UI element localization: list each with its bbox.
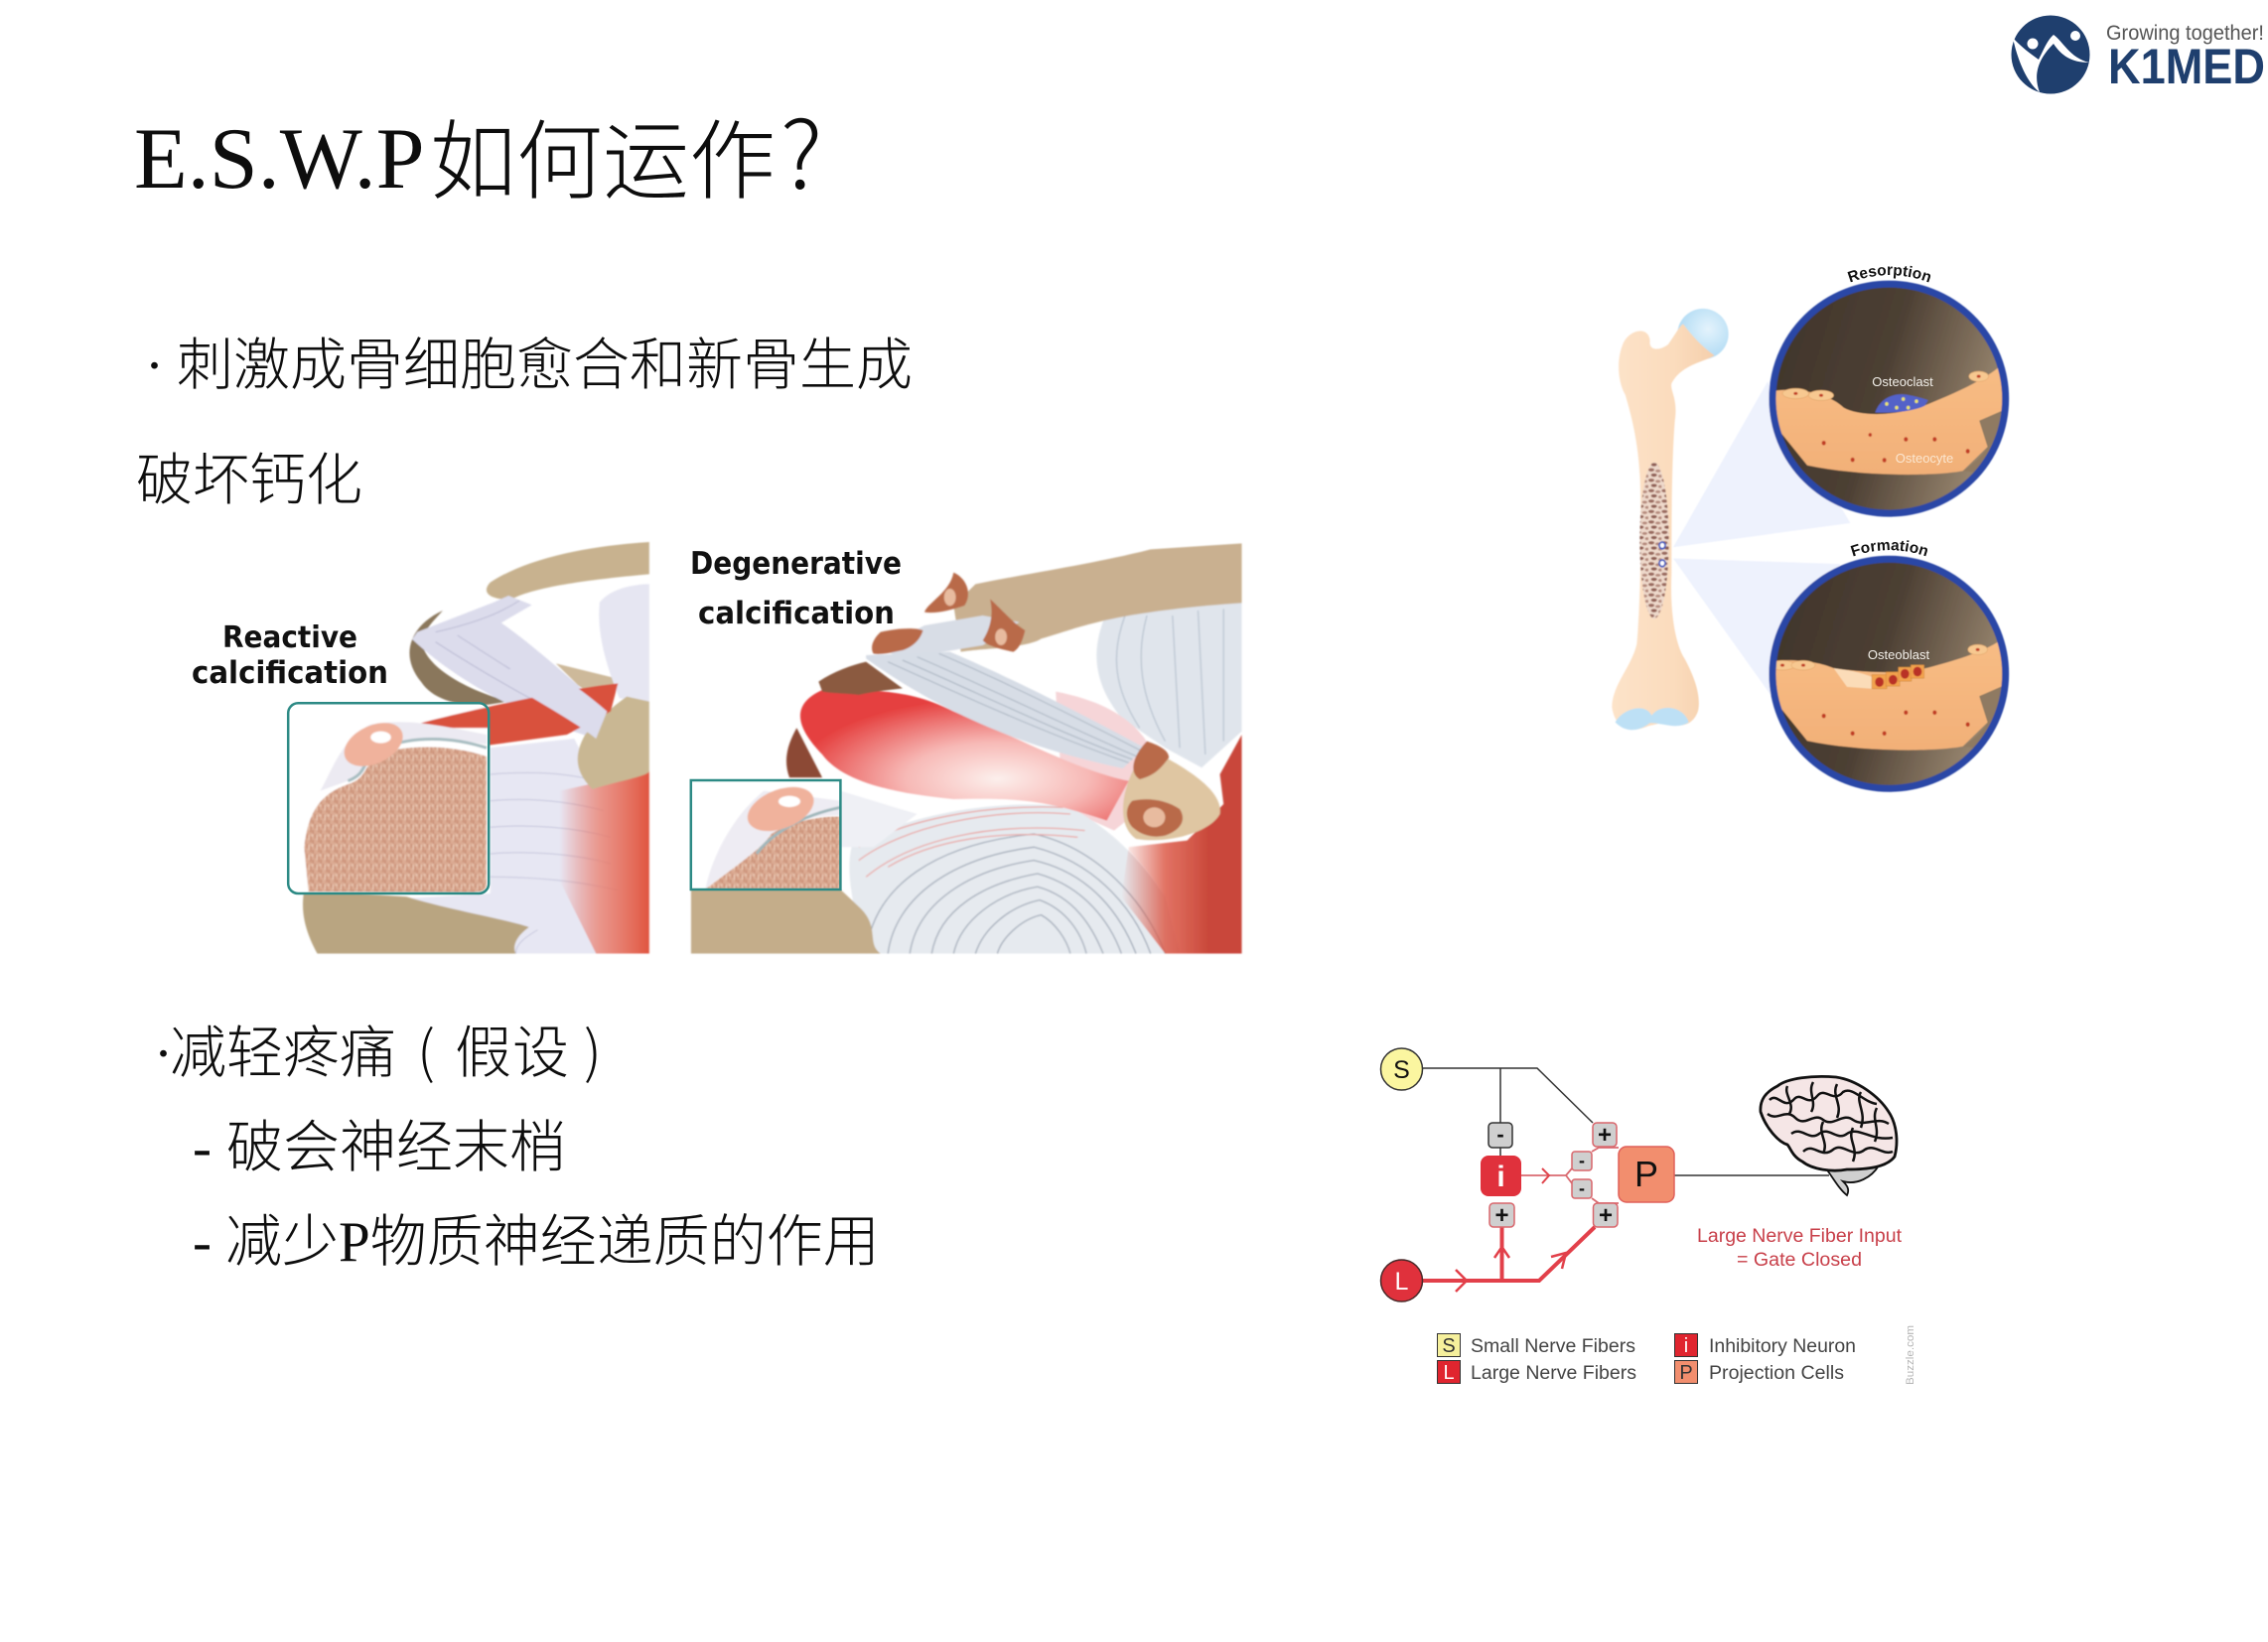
title: 如何运作 [430,92,776,217]
ligament overlap [510,669,608,739]
right dark notch [1963,683,2009,753]
bullet: reduce pain (hypothesis): 减轻疼痛 [170,1023,396,1085]
ring [1772,284,2006,513]
minus box upper: - [1579,1151,1585,1170]
arrows on large fibre [1456,1247,1566,1292]
red muscle right [1121,735,1242,954]
calcific clumps [872,573,1183,837]
label: resorption arc path and text: Resorption [1847,266,1930,282]
cell nuclei and osteocytes [1780,648,1980,736]
red muscle [421,683,618,746]
cuff pink streaks [859,807,1085,877]
femoral head [1677,309,1729,359]
tendon stripes [1116,609,1223,754]
legend L: L [1443,1362,1455,1384]
text: destroy calcification: 破坏钙化 [136,450,362,512]
legend P [1674,1360,1844,1384]
node S: S [1393,1056,1410,1084]
zoom beam upper [1673,381,1850,547]
node i [1481,1156,1521,1196]
node L [1380,1260,1422,1301]
node i: i [1496,1161,1505,1193]
spongy bone [1639,463,1669,618]
node P: P [1634,1154,1658,1194]
minus box S to i [1488,1122,1512,1148]
zoom beam lower [1673,558,1840,700]
inflamed bursa [800,690,1129,821]
right dark notch [1963,408,2009,477]
circle: resorption [1772,284,2009,513]
label: formation arc path and text [1851,540,1927,556]
ring [1772,559,2006,788]
title: ? [780,81,822,216]
minus box lower [1572,1178,1592,1198]
bone band [1774,636,2009,751]
teal frame [288,703,489,893]
main tendon band [866,652,1145,768]
label: calcification: calcification [192,655,388,691]
cartilage [348,739,487,781]
large fibre lines [1422,1227,1595,1281]
plus box bottom [1593,1202,1618,1229]
acromion bone [487,542,649,600]
bullet: reduce pain (hypothesis) [154,1008,602,1089]
logo: K1MED [2012,16,2265,94]
panel: gate control diagram [1380,1048,1916,1385]
calcification [344,723,403,767]
bullet: reduce substance P: - [193,1211,212,1274]
icon: brain [1761,1076,1897,1195]
cuff arcs [866,834,1165,954]
bullet: reduce pain (hypothesis): ( [417,1008,435,1089]
credit: Buzzle.com [1905,1325,1916,1385]
tan strip behind ligament [556,663,615,689]
node P [1619,1147,1674,1202]
tan bulb [1123,748,1220,840]
humerus [691,889,881,954]
glenoid dark crescent [409,611,508,706]
plus box top: + [1598,1122,1612,1149]
label: formation arc path and text: Formation [1851,540,1927,556]
pink bursa base [1056,692,1151,831]
lining cells [1770,644,1988,670]
minus box upper [1572,1151,1592,1170]
bursa dark base [786,728,822,777]
clump highlights [944,589,1165,827]
right muscle [560,771,649,954]
label: osteoclast: Osteoclast [1872,374,1933,389]
vertical tendons [1096,603,1242,767]
circle: formation [1770,559,2009,788]
inset calcification [735,782,827,836]
legend S: Small Nerve Fibers [1471,1336,1635,1357]
tendon stripes [491,772,588,953]
node S [1380,1048,1422,1090]
caption line 2: = Gate Closed [1737,1250,1862,1271]
inset frame [288,703,489,893]
label: osteoblast: Osteoblast [1868,647,1929,662]
bullet: destroy nerve endings: - [193,1117,212,1179]
logo emblem [2012,16,2089,93]
new osteoid [1834,668,1874,689]
plus box under i [1489,1202,1514,1229]
plus box bottom: + [1599,1202,1613,1229]
plus box top [1593,1122,1617,1149]
condyle cartilage [1616,708,1689,730]
label: osteocyte: Osteocyte [1896,451,1953,466]
legend P: Projection Cells [1709,1363,1844,1384]
osteoblasts [1872,665,1924,689]
panel: bone remodeling illustration [1612,266,2010,793]
bullet: destroy nerve endings: 破会神经末梢 [226,1117,566,1179]
ligament stripes [435,600,530,699]
lavender soft tissue [321,722,487,791]
main tendon stripes [888,653,1142,762]
inset frame [691,780,840,889]
brain folds [1768,1082,1893,1162]
pale area [840,791,918,847]
humerus lower [303,890,529,954]
minus box S to i: - [1496,1122,1504,1147]
bullet: reduce pain (hypothesis): ) [584,1008,602,1089]
femur [1612,324,1715,730]
inset centre [779,796,800,807]
frayed tendon root [818,662,903,695]
rotator cuff [849,804,1180,954]
plus box under i: + [1494,1202,1509,1229]
osteoclast [1875,394,1928,413]
logo tagline: Growing together! [2106,22,2264,45]
caption line 1: Large Nerve Fiber Input [1697,1226,1903,1247]
bullet: stimulate osteoblast healing: · [145,335,164,397]
legend i: Inhibitory Neuron [1709,1336,1856,1357]
tendon fragment [890,615,1019,655]
bullet: reduce substance P: 减少P物质神经递质的作用 [225,1211,880,1274]
title: E.S.W.P [134,111,425,207]
legend P: P [1679,1362,1693,1384]
cell nuclei and osteocytes [1793,375,1981,463]
inset bone [705,817,840,889]
label: reactive: Reactive [222,620,357,655]
lining cells [1782,371,1989,401]
title [134,81,822,217]
osteoclast nuclei [1885,397,1918,409]
bullet: stimulate osteoblast healing: 刺激成骨细胞愈合和新骨生成 [177,335,913,397]
ligament [411,595,588,735]
big tendon [413,739,598,954]
calcification centre [370,732,391,744]
label: resorption arc path and text [1847,266,1930,282]
acromion [953,543,1242,652]
bullet: reduce pain (hypothesis): 假 [455,1008,511,1089]
panel: degenerative calcification illustration [690,543,1242,954]
vertical tendon [599,584,649,702]
osteoblast nuclei [1875,667,1921,687]
panel: reactive calcification illustration [192,542,649,954]
label: calcification: calcification [698,596,895,631]
inset cartilage [757,807,840,854]
legend i: i [1684,1335,1688,1357]
clavicle bulb [578,697,649,789]
arrow: inhibitory output [1542,1168,1549,1183]
node L: L [1395,1268,1409,1296]
cerebellum and stem [1825,1165,1879,1195]
site ring 2 [1659,560,1665,567]
bone band [1774,361,2009,475]
inset soft tissue [705,791,840,889]
legend L: Large Nerve Fibers [1471,1363,1636,1384]
site ring 1 [1659,542,1665,549]
small fibre lines [1422,1068,1829,1175]
legend S: S [1442,1335,1456,1357]
bullet: reduce pain (hypothesis): 设 [512,1008,569,1089]
red thin lines [1521,1148,1619,1203]
bullet: reduce pain (hypothesis): · [154,1023,173,1085]
cerebrum outline [1761,1076,1897,1170]
inset bone [304,748,487,892]
inset box [691,780,840,889]
legend [1438,1334,1856,1384]
label: degenerative: Degenerative [690,546,902,582]
minus box lower: - [1579,1178,1585,1198]
